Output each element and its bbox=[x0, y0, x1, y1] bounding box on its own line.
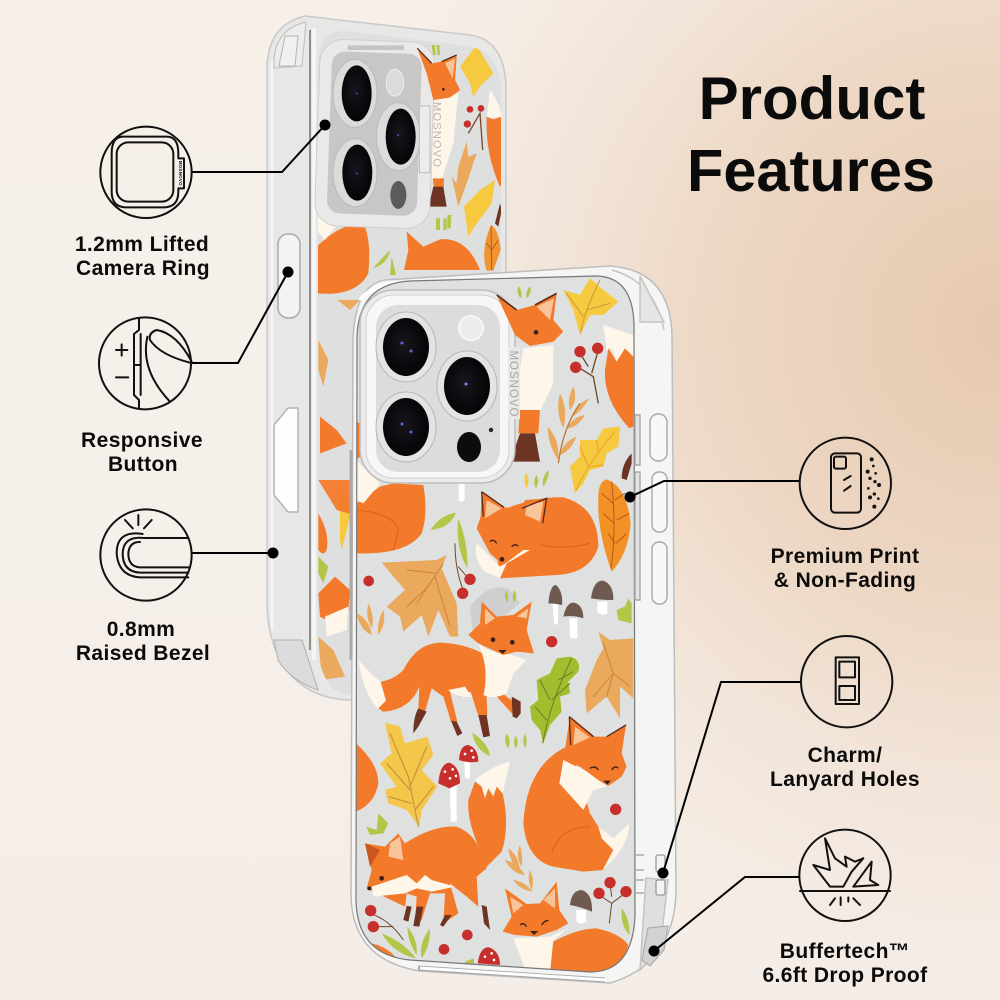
label: camera ring bbox=[75, 233, 210, 280]
front phone corner bumpers bbox=[360, 270, 668, 980]
label: drop proof bbox=[762, 940, 928, 987]
back sleeping fox body bbox=[317, 223, 369, 294]
feature: raised bezel bbox=[76, 509, 210, 665]
title: Features bbox=[687, 137, 935, 204]
yellow maple leaf bbox=[380, 723, 437, 827]
fox walking lower left bbox=[365, 762, 510, 930]
back phone print bbox=[318, 31, 501, 695]
olive leaves and berries bbox=[431, 513, 476, 599]
back olive leaves bbox=[373, 250, 396, 275]
icon: impact bbox=[799, 830, 891, 921]
label: camera ring: Camera Ring bbox=[76, 257, 210, 280]
berries sprig bbox=[570, 343, 603, 403]
front panel edge bbox=[356, 276, 635, 972]
orange blob left bbox=[356, 743, 378, 812]
front phone shell bbox=[351, 266, 676, 983]
bottom corner cutout bbox=[642, 926, 668, 966]
green oak leaf bbox=[530, 657, 579, 743]
label: raised bezel: Raised Bezel bbox=[76, 642, 210, 665]
label: responsive button: Responsive bbox=[81, 429, 203, 452]
icon: button press bbox=[99, 317, 192, 409]
label: charm holes: Lanyard Holes bbox=[770, 768, 920, 791]
back leaves bbox=[432, 45, 505, 271]
label: premium print: Premium Print bbox=[771, 545, 919, 568]
tan sprig centre bbox=[505, 845, 533, 892]
red mushrooms bbox=[438, 745, 478, 822]
back flash bbox=[386, 69, 404, 96]
back lens 3 bbox=[333, 139, 377, 207]
icon: print bbox=[800, 438, 891, 529]
leader line: print bbox=[624, 481, 800, 502]
right fox tail bbox=[603, 325, 633, 480]
back curled fox bbox=[404, 232, 480, 270]
MagSafe ring shade bbox=[470, 588, 520, 630]
label: responsive button: Button bbox=[108, 453, 178, 476]
label: charm holes: Charm/ bbox=[808, 744, 882, 767]
berries bottom right bbox=[593, 877, 632, 935]
olive sprigs bbox=[366, 733, 527, 835]
feature: responsive button bbox=[81, 317, 203, 476]
charm holes bbox=[636, 855, 665, 895]
back fox head over island bbox=[417, 48, 460, 100]
orange tree leaf bbox=[563, 278, 618, 335]
back lens 2 bbox=[376, 103, 420, 171]
label: camera ring: 1.2mm Lifted bbox=[75, 233, 209, 256]
feature: charm holes bbox=[770, 636, 920, 791]
label: premium print bbox=[771, 545, 919, 592]
title bbox=[687, 65, 935, 204]
left big fox body bbox=[356, 422, 425, 553]
icon: charm holes bbox=[801, 636, 892, 727]
brand tab: MOSNOVO bbox=[507, 350, 519, 418]
back fox white chest bbox=[318, 216, 336, 240]
small sprouts bbox=[518, 286, 549, 488]
red berry bbox=[610, 804, 621, 815]
tall orange feather leaf bbox=[598, 479, 631, 572]
fox head over island bbox=[497, 293, 563, 346]
back lens 1 bbox=[333, 59, 377, 127]
icon: bezel bbox=[100, 509, 192, 601]
left side detail bbox=[350, 450, 352, 660]
flash bbox=[459, 316, 483, 340]
label: charm holes bbox=[770, 744, 920, 791]
running fox bbox=[358, 602, 534, 737]
bottom fox bbox=[503, 882, 628, 973]
red berry bbox=[546, 636, 557, 647]
back phone case bbox=[267, 16, 515, 710]
feature: drop proof bbox=[762, 830, 928, 987]
olive sprig right bbox=[617, 598, 632, 623]
curled sleeping fox bbox=[476, 492, 598, 578]
red berry bbox=[363, 576, 374, 586]
feature: camera ring bbox=[75, 127, 210, 280]
front print bbox=[350, 270, 640, 980]
small lens bbox=[457, 432, 481, 462]
icon: camera ring bbox=[100, 127, 192, 218]
sitting fox bbox=[514, 345, 554, 462]
bottom left plants bbox=[365, 905, 474, 967]
lens 2 bbox=[437, 351, 497, 421]
label: drop proof: Buffertech™ bbox=[780, 940, 910, 963]
back phone side band bbox=[272, 22, 318, 690]
sitting fox right bbox=[523, 717, 629, 872]
leader line: charm holes bbox=[658, 682, 800, 878]
label: responsive button bbox=[81, 429, 203, 476]
icon: camera ring: MOSNOVO bbox=[178, 161, 183, 186]
back fox top bbox=[427, 55, 460, 207]
brown mushroom bbox=[570, 890, 592, 924]
lens 1 bbox=[376, 312, 436, 382]
label: drop proof: 6.6ft Drop Proof bbox=[762, 964, 928, 987]
back brand tab: MOSNOVO bbox=[430, 102, 442, 168]
back phone action button bbox=[274, 408, 298, 512]
front phone case bbox=[350, 266, 676, 983]
tan sprig bbox=[548, 387, 589, 463]
tan sprig lower left bbox=[357, 603, 384, 635]
yellow oak leaf bbox=[570, 427, 620, 493]
leader line: camera ring bbox=[192, 120, 330, 172]
back small lens bbox=[390, 181, 406, 209]
tan large leaf bbox=[382, 555, 458, 637]
back phone shell bbox=[267, 16, 506, 700]
leader line: bezel bbox=[192, 548, 278, 558]
back lower print left bbox=[337, 300, 360, 310]
lens 3 bbox=[376, 392, 436, 462]
label: raised bezel: 0.8mm bbox=[107, 618, 175, 641]
label: premium print: & Non-Fading bbox=[774, 569, 916, 592]
tan leaf right bbox=[585, 632, 633, 718]
back camera island bbox=[314, 39, 460, 229]
leader line: button bbox=[192, 266, 294, 363]
camera island bbox=[360, 290, 563, 483]
mushrooms bbox=[548, 581, 613, 638]
label: raised bezel bbox=[76, 618, 210, 665]
back phone volume button bbox=[278, 234, 300, 318]
bottom amanita bbox=[478, 947, 500, 965]
leader line: drop proof bbox=[648, 877, 800, 956]
back brand tab bbox=[419, 102, 442, 173]
feature: premium print bbox=[771, 438, 919, 592]
title: Product bbox=[699, 65, 925, 132]
front side buttons bbox=[635, 414, 667, 604]
